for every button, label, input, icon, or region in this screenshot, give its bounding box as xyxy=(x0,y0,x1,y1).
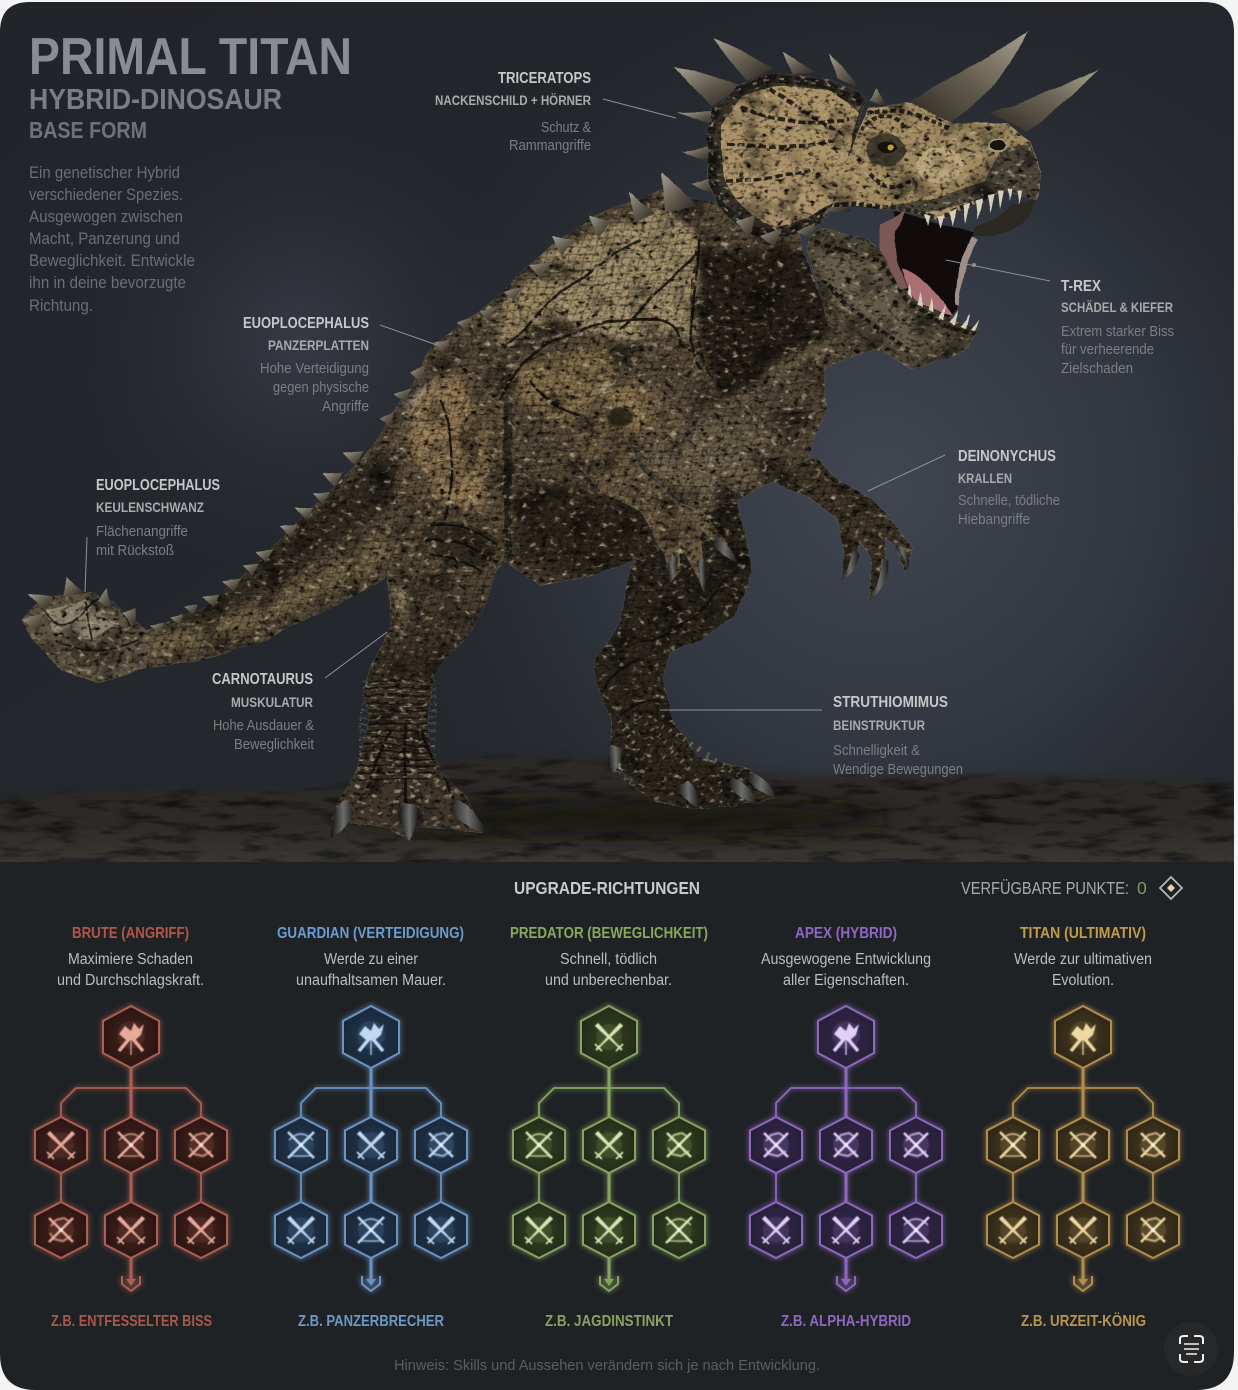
column: apex: Z.B. ALPHA-HYBRID xyxy=(781,1313,911,1330)
skull xyxy=(833,103,1042,220)
intro text: verschiedener Spezies. xyxy=(29,186,183,204)
column: guardian: unaufhaltsamen Mauer. xyxy=(296,972,446,989)
intro text: Ausgewogen zwischen xyxy=(29,208,183,226)
icon: scan button xyxy=(1164,1322,1218,1376)
callout: euoplocephalus tail xyxy=(85,477,220,592)
column: apex: APEX (HYBRID) xyxy=(795,925,897,942)
callout: t-rex: Extrem starker Biss xyxy=(1061,324,1174,340)
callout: triceratops: Schutz & xyxy=(541,120,591,136)
intro text: Macht, Panzerung und xyxy=(29,230,180,248)
upgrade heading: UPGRADE-RICHTUNGEN xyxy=(514,878,700,898)
callout: struthiomimus: Wendige Bewegungen xyxy=(833,762,963,778)
neck frill xyxy=(708,75,867,239)
far gum xyxy=(973,198,1037,236)
column: brute xyxy=(35,925,227,1330)
column: predator: PREDATOR (BEWEGLICHKEIT) xyxy=(510,925,708,942)
eye and nostril xyxy=(865,134,1007,166)
column: predator xyxy=(510,925,708,1330)
callout: t-rex: T-REX xyxy=(1061,278,1101,295)
column: brute: BRUTE (ANGRIFF) xyxy=(72,925,189,942)
callout: euoplocephalus tail: mit Rückstoß xyxy=(96,543,174,559)
callout: euoplocephalus plates: EUOPLOCEPHALUS xyxy=(243,315,369,332)
callout: struthiomimus xyxy=(660,694,963,778)
near leg xyxy=(330,353,505,840)
callout: struthiomimus: STRUTHIOMIMUS xyxy=(833,694,948,711)
column: guardian: GUARDIAN (VERTEIDIGUNG) xyxy=(277,925,464,942)
intro text xyxy=(29,164,195,315)
panel: hero scene background xyxy=(0,0,1238,870)
skill tree: predator xyxy=(513,1006,705,1291)
teeth xyxy=(908,188,1022,332)
column: apex xyxy=(750,925,942,1330)
column: titan: TITAN (ULTIMATIV) xyxy=(1020,925,1146,942)
title block xyxy=(29,28,352,315)
far hand claws xyxy=(840,545,909,602)
callout: t-rex: SCHÄDEL & KIEFER xyxy=(1061,300,1173,315)
tail and torso xyxy=(140,190,880,670)
column: guardian: Z.B. PANZERBRECHER xyxy=(298,1313,444,1330)
callout: euoplocephalus plates: Angriffe xyxy=(322,399,369,415)
available points: 0 xyxy=(1137,878,1147,898)
dorsal spikes xyxy=(150,172,697,632)
callout: deinonychus: KRALLEN xyxy=(958,471,1012,486)
column: predator: Z.B. JAGDINSTINKT xyxy=(545,1313,673,1330)
far arm xyxy=(769,457,912,602)
near hand claws xyxy=(667,535,737,593)
column: apex: Ausgewogene Entwicklung xyxy=(761,951,931,968)
skill tree: guardian xyxy=(275,1006,467,1291)
column: brute: und Durchschlagskraft. xyxy=(57,972,204,989)
callout: carnotaurus xyxy=(212,632,387,753)
callout: carnotaurus: Hohe Ausdauer & xyxy=(213,718,314,734)
near arm xyxy=(569,375,737,595)
column: guardian: Werde zu einer xyxy=(324,951,418,968)
available points: VERFÜGBARE PUNKTE: xyxy=(961,878,1129,898)
callout: carnotaurus: MUSKULATUR xyxy=(231,695,313,710)
callout: deinonychus: Schnelle, tödliche xyxy=(958,493,1060,509)
callout: carnotaurus: CARNOTAURUS xyxy=(212,671,313,688)
panel: upgrade section xyxy=(0,862,1238,1390)
callout: triceratops: Rammangriffe xyxy=(509,138,591,154)
callout: euoplocephalus plates: Hohe Verteidigung xyxy=(260,361,369,377)
callout: struthiomimus: BEINSTRUKTUR xyxy=(833,718,925,733)
head horns xyxy=(673,31,1100,195)
callout: euoplocephalus tail: Flächenangriffe xyxy=(96,524,188,540)
callout: t-rex: für verheerende xyxy=(1061,342,1154,358)
callout: deinonychus: DEINONYCHUS xyxy=(958,448,1056,465)
callout: t-rex xyxy=(946,260,1174,377)
callout: euoplocephalus plates: PANZERPLATTEN xyxy=(268,338,369,353)
column: titan: Evolution. xyxy=(1052,972,1114,989)
callout: deinonychus: Hiebangriffe xyxy=(958,512,1030,528)
column: guardian xyxy=(275,925,467,1330)
column: titan xyxy=(987,925,1179,1330)
club spikes xyxy=(22,577,136,632)
far foot claws xyxy=(608,745,776,808)
column: predator: und unberechenbar. xyxy=(545,972,672,989)
far leg xyxy=(593,495,775,808)
title: PRIMAL TITAN xyxy=(29,28,352,86)
icon: point diamond xyxy=(1160,877,1182,899)
callout: carnotaurus: Beweglichkeit xyxy=(234,737,314,753)
callout: triceratops: TRICERATOPS xyxy=(498,70,591,87)
callout: deinonychus xyxy=(868,448,1060,528)
callout: euoplocephalus tail: EUOPLOCEPHALUS xyxy=(96,477,220,494)
footnote: Hinweis: Skills und Aussehen verändern sich je nach Entwicklung. xyxy=(394,1357,820,1374)
intro text: Richtung. xyxy=(29,297,93,315)
callout: euoplocephalus plates: gegen physische xyxy=(273,380,369,396)
callout: triceratops xyxy=(435,70,676,154)
dinosaur illustration xyxy=(22,31,1100,841)
callout: struthiomimus: Schnelligkeit & xyxy=(833,743,920,759)
callout: euoplocephalus plates xyxy=(243,315,437,415)
skill tree: titan xyxy=(987,1006,1179,1291)
column: predator: Schnell, tödlich xyxy=(560,951,657,968)
callout: euoplocephalus tail: KEULENSCHWANZ xyxy=(96,500,204,515)
intro text: Beweglichkeit. Entwickle xyxy=(29,252,195,270)
open mouth xyxy=(880,212,978,318)
neck collar spikes xyxy=(735,206,850,247)
callout: t-rex: Zielschaden xyxy=(1061,361,1133,377)
tail club xyxy=(22,593,150,682)
skill tree: apex xyxy=(750,1006,942,1291)
column: titan: Werde zur ultimativen xyxy=(1014,951,1152,968)
skill tree: brute xyxy=(35,1006,227,1291)
near foot claws xyxy=(331,800,485,841)
subtitle: HYBRID-DINOSAUR xyxy=(29,84,282,116)
column: titan: Z.B. URZEIT-KÖNIG xyxy=(1021,1311,1146,1330)
lower jaw xyxy=(808,227,978,368)
column: brute: Z.B. ENTFESSELTER BISS xyxy=(51,1313,212,1330)
column: brute: Maximiere Schaden xyxy=(68,951,193,968)
intro text: Ein genetischer Hybrid xyxy=(29,164,180,182)
callout: triceratops: NACKENSCHILD + HÖRNER xyxy=(435,93,591,108)
intro text: ihn in deine bevorzugte xyxy=(29,274,186,292)
column: apex: aller Eigenschaften. xyxy=(783,972,909,989)
form label: BASE FORM xyxy=(29,117,147,143)
